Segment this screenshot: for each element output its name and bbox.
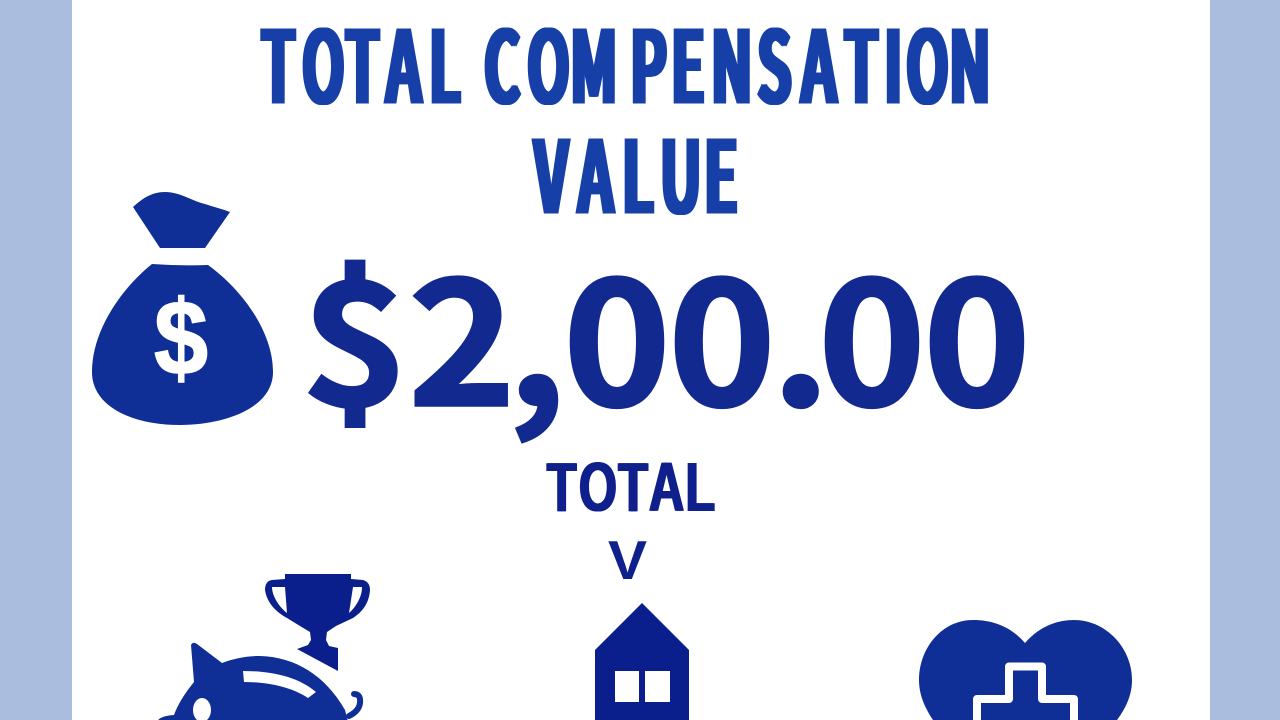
title: VALUE — [533, 97, 738, 243]
icon: trophy — [265, 574, 370, 671]
amount: $2,00.00 — [301, 208, 1031, 455]
subheading: total: TOTAL — [547, 447, 715, 526]
icon: money bag: $ — [154, 279, 208, 397]
letter: V: V — [608, 529, 647, 591]
icon: piggy bank — [157, 643, 360, 720]
icon: house — [595, 603, 689, 720]
icon: money bag — [92, 192, 273, 425]
title — [261, 0, 991, 243]
icon: heart with cross — [919, 620, 1132, 720]
